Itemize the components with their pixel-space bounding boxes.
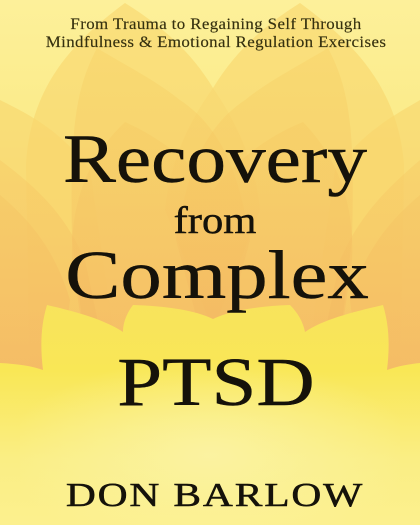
subtitle: [46, 16, 386, 51]
title: from: from: [174, 200, 256, 242]
back petals: [0, 3, 420, 380]
title: Complex: Complex: [65, 237, 369, 313]
title: PTSD: PTSD: [117, 344, 315, 420]
lower yellow lotus: [0, 305, 420, 525]
middle petals: [0, 48, 420, 380]
author: DON BARLOW: [66, 477, 364, 514]
subtitle: From Trauma to Regaining Self Through: [70, 16, 362, 33]
title: Recovery: Recovery: [63, 121, 367, 197]
subtitle: Mindfulness & Emotional Regulation Exercises: [46, 34, 386, 51]
